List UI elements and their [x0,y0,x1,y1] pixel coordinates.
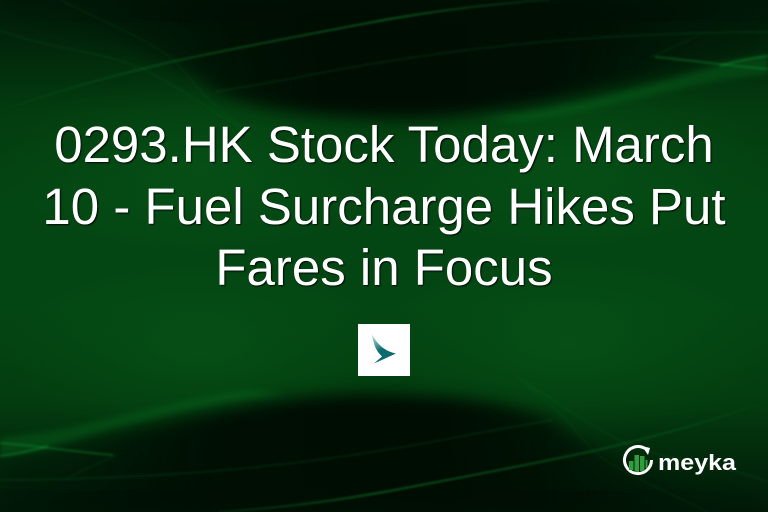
icon: airline logo tile [358,324,410,376]
title: 10 - Fuel Surcharge Hikes Put [42,178,726,234]
brand: meyka logo [622,445,737,476]
brand wordmark: meyka [658,450,737,475]
title: Fares in Focus [215,239,553,296]
title [42,116,727,296]
title: 0293.HK Stock Today: March [54,116,714,173]
icon: meyka ring with bars [625,446,652,474]
